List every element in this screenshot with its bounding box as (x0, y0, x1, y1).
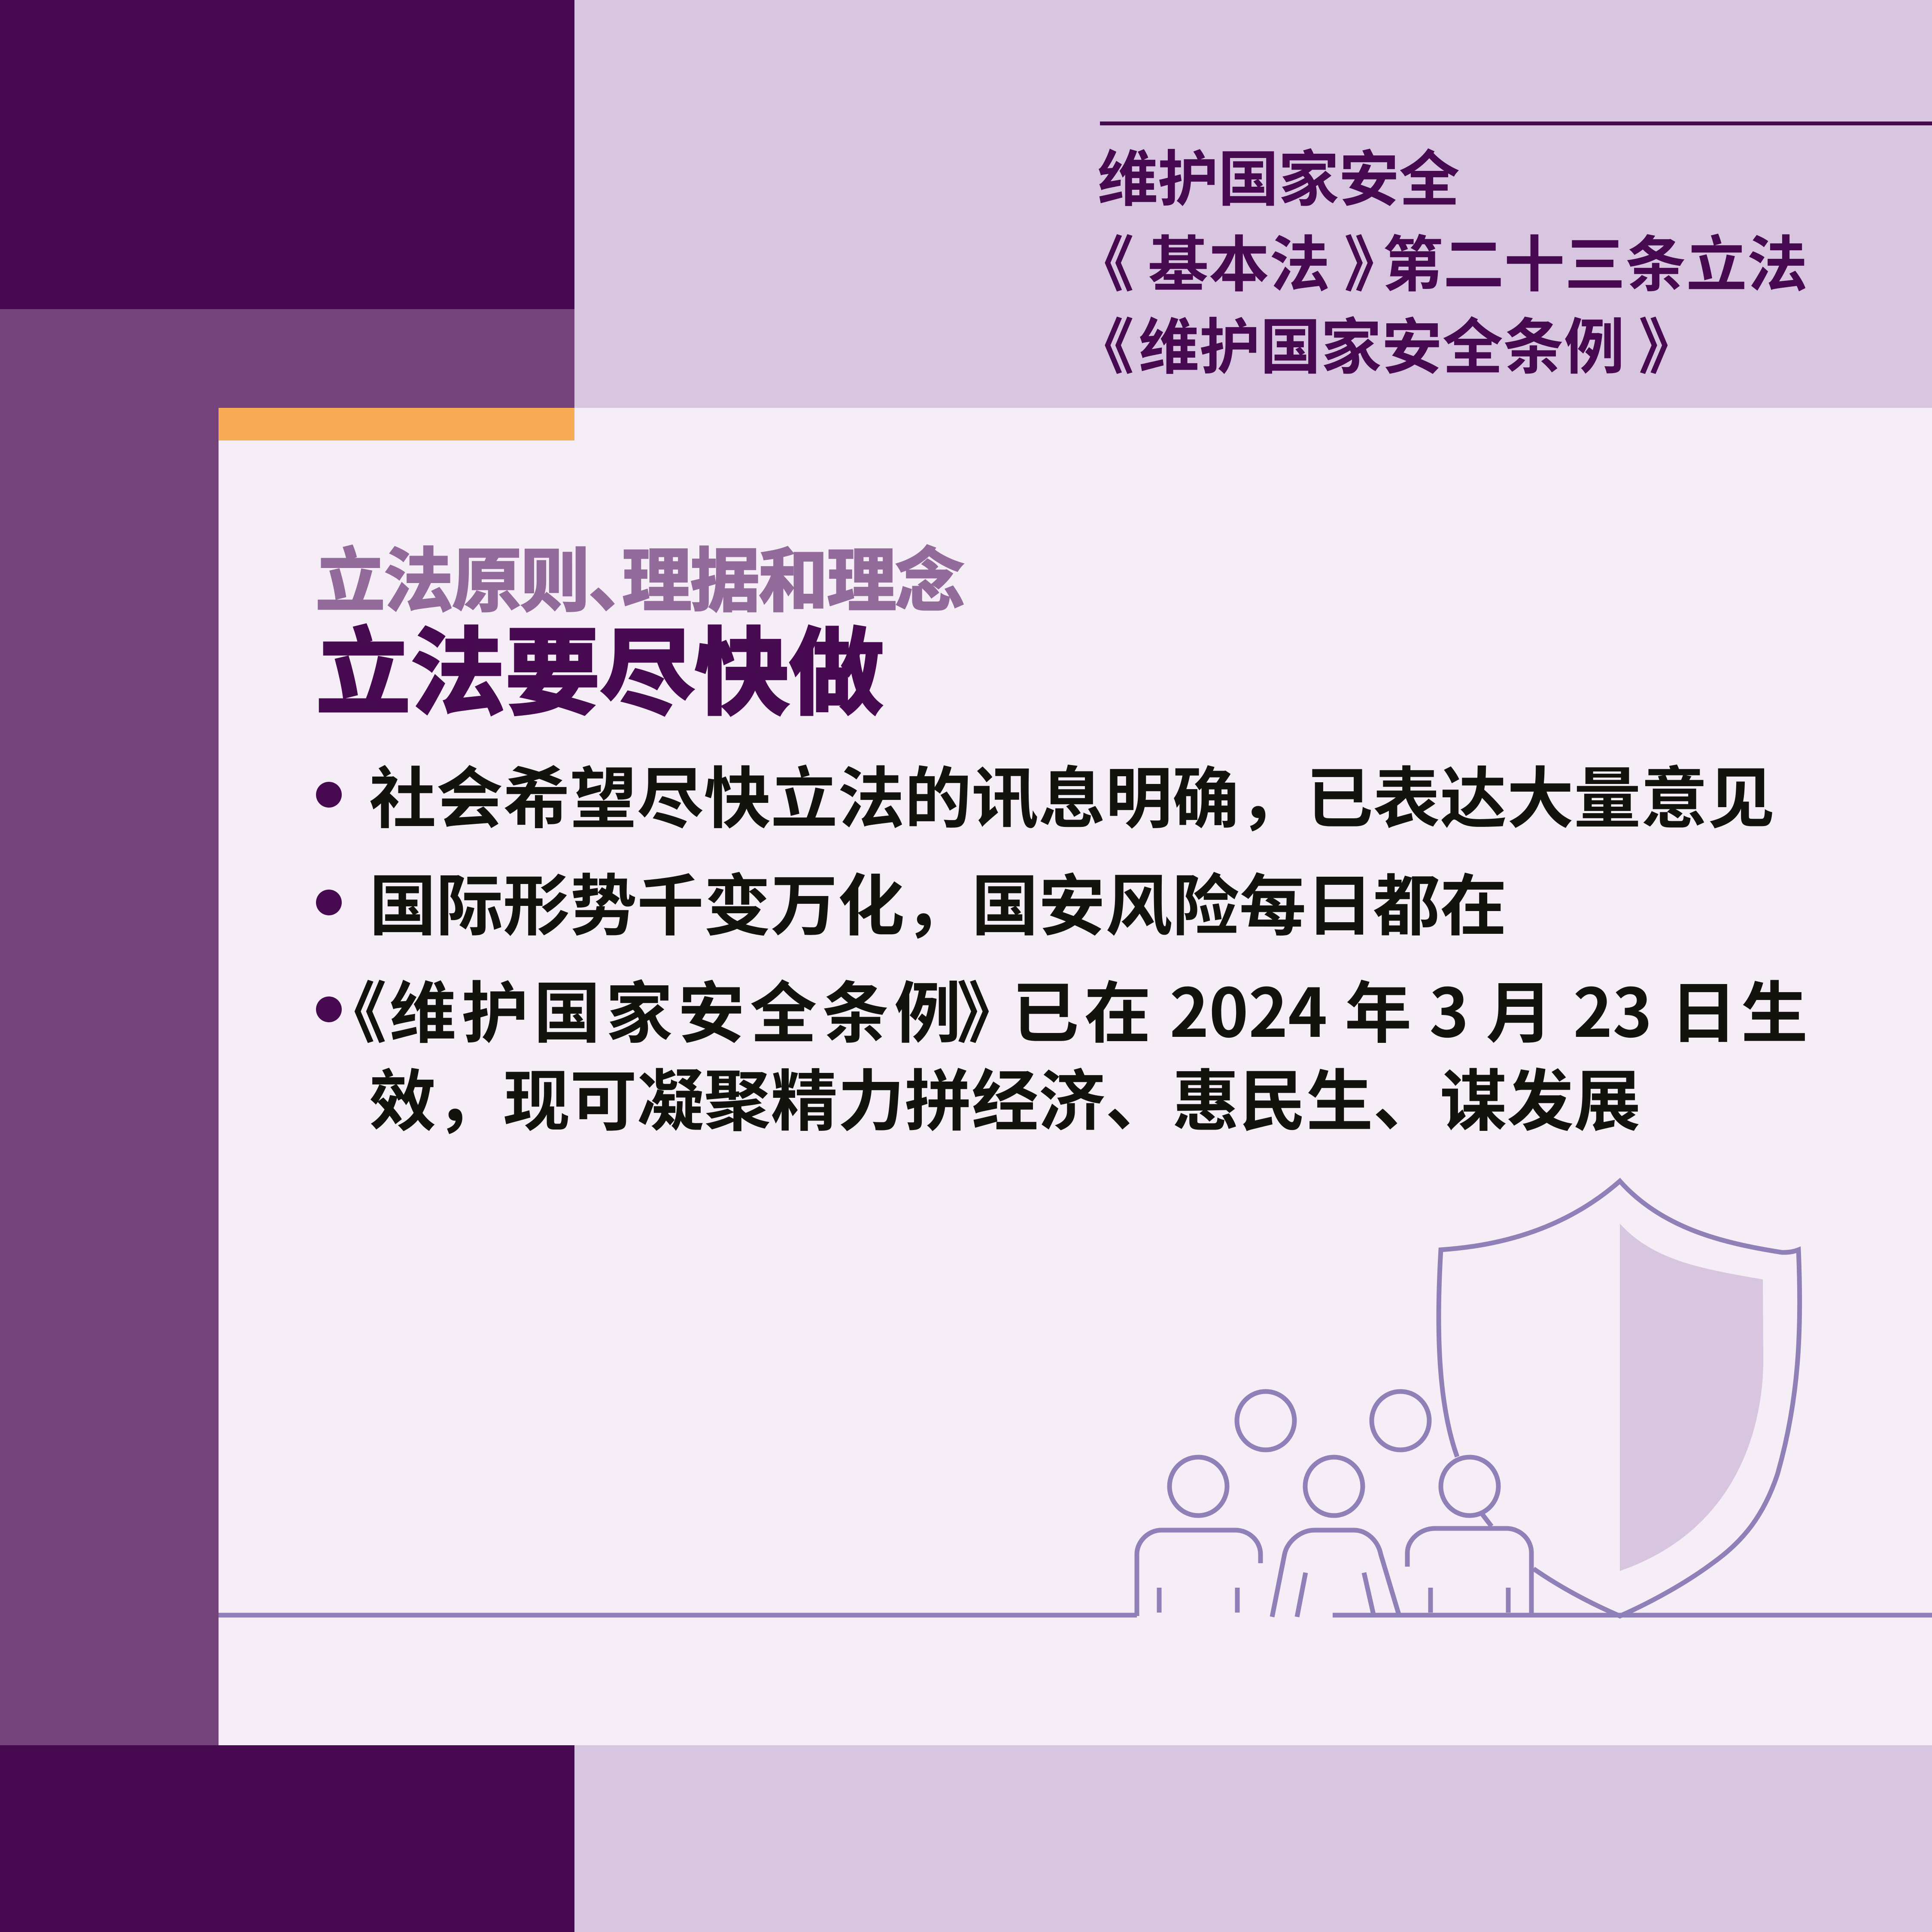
bullet 3: 2024 (1170, 959, 1327, 1056)
panel: dark top-left block (0, 0, 574, 309)
illustration: shield and people (219, 1181, 1932, 1617)
bullet 3: 月 (1486, 959, 1553, 1056)
bullet 1: 社会希望尽快立法的讯息明确，已表达大量意见 (369, 744, 1774, 841)
title block: 《 基本法 》 (1073, 216, 1405, 304)
bullet 3: 效，现可凝聚精力拼经济、惠民生、谋发展 (369, 1047, 1641, 1144)
title block: 《 (1073, 298, 1134, 386)
person 1 (1137, 1457, 1261, 1616)
icon: shield outline (1439, 1181, 1800, 1616)
title block: 第二十三条立法 (1382, 216, 1807, 304)
header rule (1100, 122, 1932, 125)
ground line (219, 1613, 1932, 1618)
panel: main content (219, 408, 1932, 1745)
main heading: 立法要尽快做 (316, 596, 884, 734)
bullet 3: 日 (1670, 959, 1737, 1056)
panel: dark bottom-left block (0, 1745, 574, 1932)
person 2 (1237, 1391, 1399, 1617)
orange accent bar (219, 408, 574, 440)
title block: 维护国家安全条例 》 (1139, 298, 1699, 386)
bullet 3: 已在 (1012, 959, 1156, 1056)
bullet 3: 年 (1345, 959, 1412, 1056)
bullet 3: 3 (1429, 959, 1469, 1056)
bullet list (316, 744, 1808, 1144)
bullet 3: 23 (1573, 959, 1652, 1056)
bullet 3: 维护国家安全条例 (389, 959, 966, 1056)
icon: shield fill (1620, 1224, 1763, 1571)
bullet 2: 国际形势千变万化，国安风险每日都在 (369, 852, 1507, 949)
panel: mid purple band (0, 309, 574, 1745)
bullet 3: 》 (957, 959, 1024, 1056)
subheading: 立法原则、理据和理念 (316, 525, 963, 626)
bullet 3: 生 (1741, 959, 1808, 1056)
bullet 3 (316, 959, 1808, 1144)
person 3 (1372, 1391, 1531, 1615)
people group (1137, 1391, 1531, 1617)
title block (1073, 130, 1807, 386)
bullet 3: 《 (320, 959, 387, 1056)
title block: 维护国家安全 (1097, 130, 1459, 218)
